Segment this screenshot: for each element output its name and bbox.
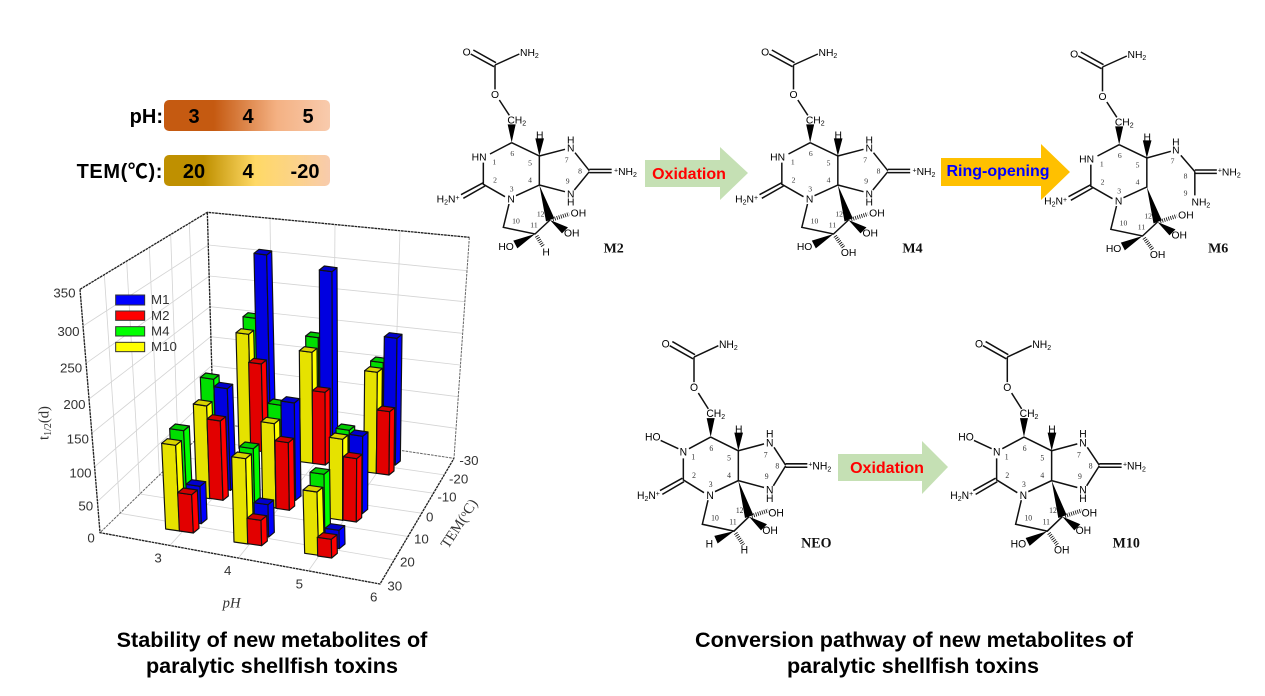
molecule: M10: HO <box>1011 539 1026 551</box>
molecule: M4: OH <box>841 248 856 259</box>
molecule: M6: 11 <box>1138 223 1145 232</box>
molecule: M4: HN <box>770 152 785 163</box>
molecule: M10: 8 <box>1089 462 1093 471</box>
molecule: M4: H <box>865 198 873 209</box>
molecule: M10: OH <box>1082 509 1097 520</box>
bars: front row <box>162 424 345 558</box>
molecule: NEO: 4 <box>727 471 731 480</box>
molecule: M6: H <box>1044 197 1052 208</box>
molecule: M6: OH <box>1150 250 1165 261</box>
molecule: NEO: 6 <box>709 444 713 453</box>
y-axis tick labels: 350 <box>53 285 76 300</box>
molecule: M4: O <box>789 90 798 101</box>
pH values: 4 <box>242 106 254 128</box>
pH label: pH: <box>130 106 163 128</box>
molecule: M4: H <box>735 195 743 206</box>
molecule: M10: NH <box>1127 461 1142 472</box>
molecule: M2: H <box>542 247 550 258</box>
chart legend: M10 <box>151 339 177 354</box>
temperature gradient bar <box>164 155 330 186</box>
caption: conversion pathway <box>695 627 1134 678</box>
molecule: M2: H <box>567 135 574 146</box>
molecule: M10: H <box>950 491 958 502</box>
molecule: M4: HO <box>797 242 812 253</box>
molecule: M4: OH <box>862 229 878 240</box>
temperature label: TEM(℃): <box>77 161 163 183</box>
molecule: M2: HO <box>498 242 514 253</box>
y-axis tick labels: 200 <box>63 397 86 412</box>
y-axis tick labels: 150 <box>67 431 89 446</box>
molecule: M10: 9 <box>1078 472 1082 481</box>
temperature values: 20 <box>183 161 205 183</box>
molecule: NEO: 7 <box>764 451 768 460</box>
molecule: NEO <box>637 339 831 557</box>
molecule: NEO: N <box>648 491 656 502</box>
caption: conversion pathway: Conversion pathway of new metabolites of <box>695 627 1134 652</box>
molecule: M2: NH <box>618 167 633 178</box>
molecule: NEO: H <box>766 494 773 505</box>
molecule: M10: CH <box>1020 409 1035 420</box>
molecule: M6: 2 <box>1101 178 1105 187</box>
molecule: NEO: N <box>766 486 773 497</box>
molecule: M4: OH <box>869 209 885 220</box>
molecule: M2: H <box>536 131 543 142</box>
pH axis tick labels <box>154 550 377 605</box>
molecule: M4: 5 <box>827 158 831 167</box>
molecule: M4: 10 <box>811 217 818 226</box>
molecule: M2: 9 <box>566 177 570 186</box>
temperature axis tick labels: -30 <box>459 453 479 468</box>
molecule: NEO: H <box>735 425 742 436</box>
molecule: NEO: 1 <box>691 452 695 461</box>
molecule: NEO: 2 <box>827 465 831 473</box>
molecule: M6: OH <box>1171 231 1187 242</box>
molecule: M4: 12 <box>835 209 843 218</box>
molecule: M4: + <box>754 195 758 202</box>
molecule: M4: 2 <box>792 176 796 185</box>
y-axis title: 1/2 <box>43 423 54 436</box>
arrow: ring-opening M4 to M6 <box>941 144 1070 200</box>
molecule: M10: 2 <box>1005 471 1009 480</box>
temperature axis title: C) <box>460 496 481 518</box>
molecule: M4: O <box>761 48 769 59</box>
molecule: M4: 6 <box>809 149 813 158</box>
molecule: M2: OH <box>571 209 586 220</box>
molecule: NEO: HO <box>645 432 660 444</box>
molecule: M4: 7 <box>863 156 867 165</box>
molecule: M10: 11 <box>1043 517 1050 527</box>
molecule: M10: OH <box>1054 546 1069 557</box>
molecule: M6 <box>1044 50 1241 261</box>
molecule: NEO: O <box>662 339 670 350</box>
molecule: M6: 4 <box>1136 178 1140 187</box>
temperature axis title: TEM( <box>438 513 471 552</box>
molecule: M2: 5 <box>528 158 532 167</box>
molecule: M10: + <box>1123 460 1127 469</box>
molecule: M6: 3 <box>1117 186 1121 195</box>
temperature axis tick labels: 20 <box>400 555 415 570</box>
molecule: M2: 12 <box>537 209 545 218</box>
caption: conversion pathway: paralytic shellfish toxins <box>787 653 1039 678</box>
temperature values: -20 <box>291 161 319 183</box>
molecule: NEO: N <box>680 447 687 459</box>
pH values: 5 <box>302 106 314 128</box>
molecule: M4: N <box>806 195 813 206</box>
molecule: M6: NH <box>1222 167 1237 178</box>
caption: stability: paralytic shellfish toxins <box>146 653 398 678</box>
molecule: M4: N <box>747 195 754 206</box>
molecule: M2: + <box>455 195 460 202</box>
molecule: M6: 5 <box>1136 160 1140 169</box>
arrow: ring-opening M4 to M6: Ring-opening <box>946 163 1050 180</box>
molecule: M2: O <box>491 90 499 101</box>
molecule: M6: 2 <box>1130 122 1134 129</box>
molecule: M2: CH <box>507 115 522 126</box>
molecule: M6: 2 <box>1206 202 1210 209</box>
molecule: M4: N <box>865 144 873 155</box>
pH values: 3 <box>188 106 200 128</box>
molecule: M10: 12 <box>1049 506 1057 515</box>
molecule: NEO: 8 <box>775 462 779 471</box>
molecule: M4: 11 <box>829 221 836 230</box>
temperature axis tick labels: 30 <box>387 579 402 594</box>
molecule: M10: 2 <box>1047 344 1051 352</box>
arrow: oxidation NEO to M10: Oxidation <box>850 460 924 477</box>
molecule: M2: H <box>567 198 574 209</box>
pH axis title: pH <box>222 595 242 611</box>
temperature axis tick labels: 0 <box>426 510 433 525</box>
molecule: NEO: + <box>656 490 660 498</box>
molecule: M2: 11 <box>530 221 538 230</box>
3D bar chart: half-life by pH and temperature <box>36 212 481 611</box>
y-axis title: (d) <box>36 406 52 423</box>
molecule: M6: OH <box>1178 211 1194 222</box>
molecule: M2: N <box>507 195 515 206</box>
molecule: M2: 2 <box>493 176 497 185</box>
y-axis tick labels: 300 <box>57 324 80 339</box>
molecule: M2: 3 <box>510 184 514 193</box>
molecule: NEO: 3 <box>709 480 713 489</box>
molecule: M6: 8 <box>1184 172 1188 181</box>
molecule: NEO: 12 <box>736 506 744 515</box>
molecule: M10: M10 <box>1113 535 1140 552</box>
molecule: M10: HO <box>958 432 974 444</box>
legend: pH scale <box>130 100 330 131</box>
chart legend <box>116 292 177 354</box>
chart legend: M1 <box>151 292 170 307</box>
molecule: M2: 4 <box>528 176 532 185</box>
pH axis tick labels: 5 <box>296 576 303 591</box>
molecule: M6: NH <box>1127 50 1142 61</box>
molecule: NEO: 9 <box>765 472 769 481</box>
molecule: M10: O <box>1003 383 1011 394</box>
molecule: M10: 2 <box>1142 465 1146 473</box>
y-axis tick labels <box>53 285 95 546</box>
molecule: NEO: OH <box>762 526 778 537</box>
molecule: M10: N <box>993 447 1000 459</box>
molecule: NEO: N <box>766 438 773 449</box>
molecule: M6: HO <box>1106 244 1121 255</box>
molecule: M6: 1 <box>1100 159 1104 168</box>
molecule: M6: + <box>1218 168 1222 175</box>
molecule: M10: 2 <box>1035 413 1038 421</box>
molecule: M6: O <box>1070 50 1078 61</box>
molecule: NEO: 2 <box>734 344 738 352</box>
molecule: M10: N <box>1079 438 1087 449</box>
pH axis tick labels: 4 <box>224 563 232 578</box>
temperature values <box>183 161 319 183</box>
molecule: M4: NH <box>917 167 932 178</box>
molecule: M4: 1 <box>791 157 795 166</box>
molecule: M4: 2 <box>932 172 936 179</box>
chart legend: M4 <box>151 324 170 339</box>
molecule: M2: 2 <box>633 172 637 179</box>
molecule: M10: 1 <box>1005 452 1009 461</box>
molecule: M10: 5 <box>1040 453 1044 462</box>
molecule: M6: CH <box>1115 117 1130 128</box>
molecule: M4: 2 <box>833 53 837 60</box>
molecule: M10: H <box>1079 494 1087 505</box>
molecule: M6: N <box>1056 197 1063 208</box>
molecule: M4: 3 <box>808 184 812 193</box>
molecule: NEO: OH <box>768 509 784 520</box>
molecule: M10: + <box>969 490 973 498</box>
molecule: NEO: 11 <box>729 517 737 527</box>
molecule: M6: 12 <box>1144 211 1152 220</box>
molecule: M10: NH <box>1032 340 1047 351</box>
molecule: NEO: NH <box>812 461 827 472</box>
molecule: M2: 6 <box>510 149 514 158</box>
chart legend: M2 <box>151 308 170 323</box>
molecule: NEO: O <box>690 383 698 394</box>
molecule: M2: 1 <box>492 157 496 166</box>
molecule: M2: N <box>448 195 455 206</box>
molecule: M10: H <box>1079 430 1087 441</box>
temperature axis tick labels: -20 <box>449 471 468 486</box>
arrow: oxidation NEO to M10 <box>838 441 948 494</box>
molecule: M2: 2 <box>535 53 539 60</box>
molecule: NEO: N <box>706 491 714 502</box>
caption: stability: Stability of new metabolites of <box>117 627 428 652</box>
molecule: M10: H <box>1048 425 1056 436</box>
molecule: M6: O <box>1098 92 1107 103</box>
molecule: NEO: H <box>766 430 773 441</box>
molecule: M2: 2 <box>522 120 526 127</box>
molecule: M6: HN <box>1079 154 1094 165</box>
molecule: M2: OH <box>564 229 579 240</box>
molecule: NEO: H <box>741 546 748 557</box>
molecule: M6: N <box>1172 146 1180 157</box>
temperature axis tick labels <box>387 453 479 594</box>
temperature values: 4 <box>242 161 254 183</box>
pH axis tick labels: 6 <box>370 590 377 605</box>
caption: stability <box>117 627 428 678</box>
molecule: NEO: 2 <box>644 495 648 503</box>
molecule: M4: + <box>912 167 917 174</box>
molecule: M10: 3 <box>1022 480 1026 489</box>
molecule: M6: 2 <box>1052 202 1056 209</box>
molecule: M10: O <box>975 339 983 350</box>
molecule: M10: N <box>1020 491 1027 502</box>
molecule: M10: N <box>962 491 969 502</box>
molecule: NEO: NEO <box>801 535 831 552</box>
molecule: M10: 2 <box>958 495 962 503</box>
molecule: M4: 8 <box>877 166 881 175</box>
molecule: M6: H <box>1172 137 1180 148</box>
y-axis tick labels: 50 <box>78 499 93 514</box>
arrow: oxidation M2 to M4 <box>645 147 748 200</box>
pH values <box>188 106 314 128</box>
temperature axis title: o <box>458 509 469 519</box>
molecule: M2: 8 <box>578 166 582 175</box>
arrow: oxidation M2 to M4: Oxidation <box>652 166 726 183</box>
molecule: M10: 7 <box>1077 451 1081 460</box>
pH axis tick labels: 3 <box>154 550 162 565</box>
molecule: M10: 6 <box>1023 444 1027 453</box>
y-axis tick labels: 250 <box>60 361 82 376</box>
molecule: M4: 2 <box>821 120 825 127</box>
molecule: NEO: + <box>808 460 812 469</box>
y-axis tick labels: 0 <box>87 531 95 546</box>
molecule: NEO: 5 <box>727 453 731 462</box>
molecule: NEO: 2 <box>721 413 725 421</box>
molecule: M4 <box>735 48 936 259</box>
molecule: NEO: NH <box>719 340 734 351</box>
molecule: M4: 9 <box>864 177 868 186</box>
y-axis tick labels: 100 <box>69 466 92 481</box>
molecule: NEO: 2 <box>692 471 696 480</box>
molecule: M6: N <box>1115 197 1122 208</box>
molecule: M2: 7 <box>565 156 569 165</box>
molecule: M2: H <box>437 195 444 206</box>
bars: back row <box>236 249 402 475</box>
molecule: NEO: 10 <box>711 513 719 522</box>
molecule: M4: N <box>865 190 873 201</box>
molecule: M4: H <box>865 135 873 146</box>
molecule: M2: N <box>567 190 574 201</box>
molecule: M2: HN <box>472 152 487 163</box>
molecule: NEO: H <box>637 491 644 502</box>
y-axis title: t <box>36 436 52 440</box>
temperature axis tick labels: -10 <box>437 490 457 505</box>
molecule: M6: 10 <box>1120 219 1127 228</box>
molecule: M6: + <box>1063 197 1067 204</box>
molecule: M6: M6 <box>1208 242 1228 257</box>
molecule: M4: 2 <box>743 200 747 207</box>
molecule: M2: NH <box>520 48 535 59</box>
molecule: M10: 10 <box>1024 513 1032 522</box>
molecule: NEO: CH <box>706 409 721 420</box>
temperature axis tick labels: 10 <box>414 531 429 546</box>
molecule: M10 <box>950 339 1146 557</box>
bars: middle row <box>193 373 368 522</box>
molecule: M2: 2 <box>444 200 448 207</box>
molecule: M2: 10 <box>512 217 520 226</box>
molecule: M6: NH <box>1191 197 1206 208</box>
molecule: M10: N <box>1079 486 1087 497</box>
molecule: M6: 2 <box>1142 55 1146 62</box>
molecule: M4: CH <box>806 115 821 126</box>
molecule: M2: N <box>567 144 574 155</box>
pH gradient bar <box>164 100 330 131</box>
molecule: M6: 9 <box>1184 189 1188 198</box>
molecule: M10: OH <box>1076 526 1091 537</box>
molecule: M10: 4 <box>1040 471 1044 480</box>
molecule: M6: 2 <box>1237 172 1241 179</box>
molecule: M4: 4 <box>827 176 831 185</box>
molecule: M2 <box>437 48 637 258</box>
molecule: M4: NH <box>818 48 833 59</box>
molecule: M4: H <box>834 131 842 142</box>
molecule: M2: M2 <box>604 242 624 257</box>
molecule: M6: 6 <box>1118 151 1122 160</box>
molecule: M4: M4 <box>902 242 923 257</box>
legend: temperature scale <box>77 155 330 186</box>
molecule: M6: H <box>1143 133 1151 144</box>
molecule: M6: 7 <box>1171 156 1175 165</box>
molecule: M2: + <box>614 167 618 174</box>
molecule: M2: O <box>463 48 471 59</box>
molecule: NEO: H <box>706 539 713 551</box>
